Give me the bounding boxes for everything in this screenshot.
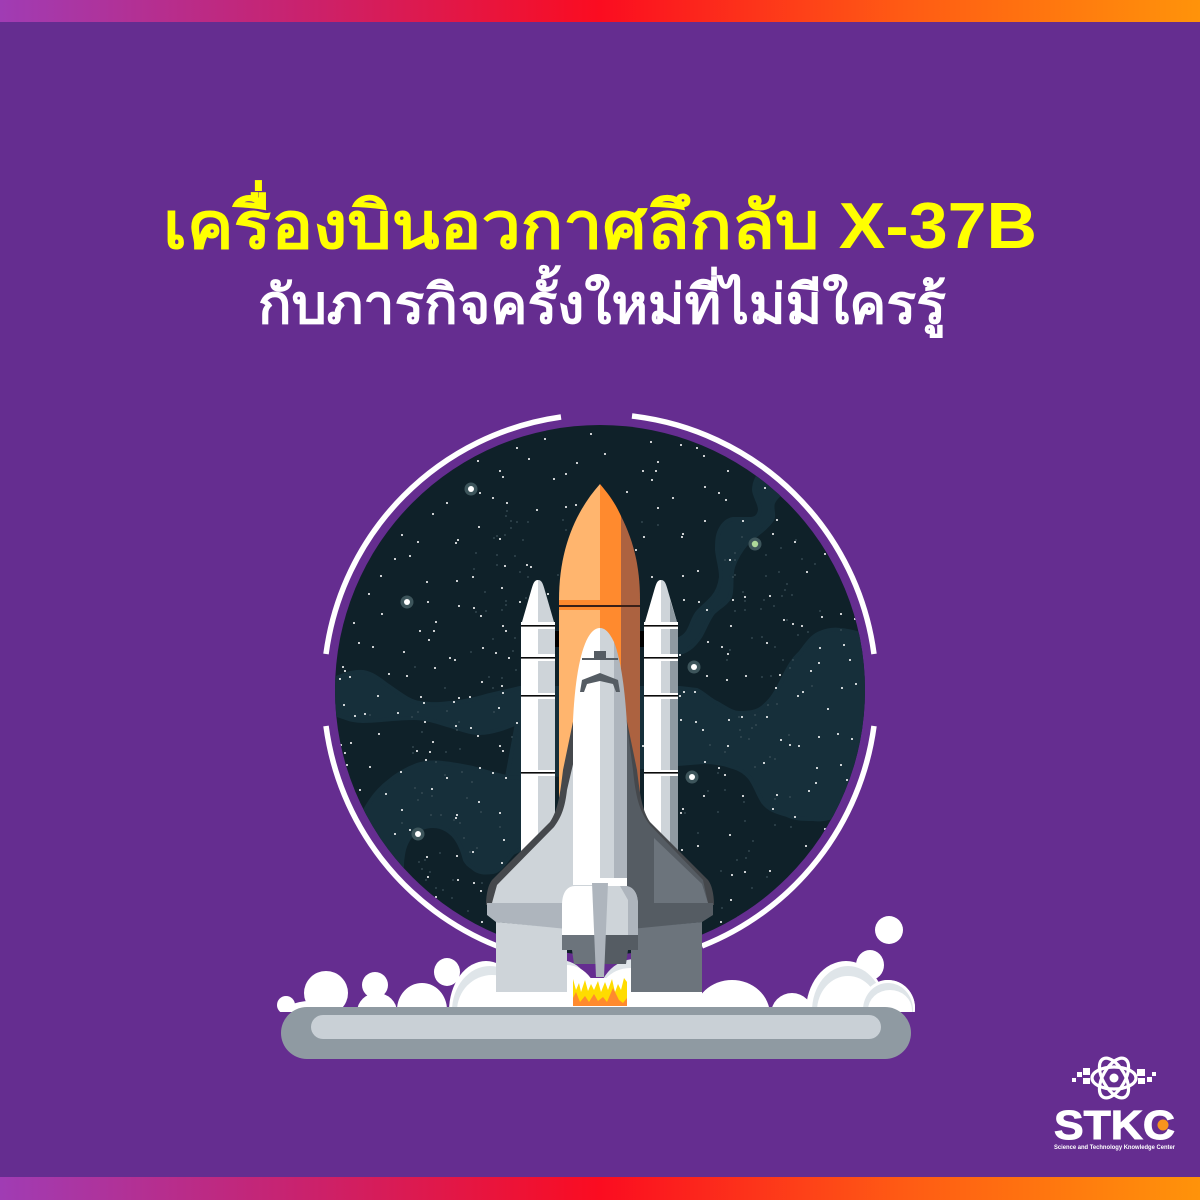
bottom gradient bar [0, 1177, 1200, 1200]
glowing stars [400, 482, 762, 840]
left wing [492, 760, 600, 903]
icon: atom [1092, 1053, 1136, 1103]
clouds of smoke [277, 916, 915, 1012]
icon: data pixels [1072, 1068, 1156, 1084]
central plume [522, 959, 769, 1007]
left booster [521, 580, 555, 876]
title [163, 180, 1037, 338]
tagline: Science and Technology Knowledge Center [1054, 1145, 1176, 1151]
wing underside [487, 903, 600, 933]
tail fin [592, 883, 608, 977]
orbiter fuselage [573, 628, 627, 886]
wordmark: STKC [1054, 1102, 1175, 1148]
heading line: white: กับภารกิจครั้งใหม่ที่ไม่มีใครรู้ [258, 265, 946, 338]
nebula [325, 470, 875, 885]
night sky [325, 420, 875, 960]
bright stars [340, 434, 856, 922]
external fuel tank [559, 484, 640, 920]
logo: STKC [1054, 1053, 1176, 1151]
left clouds [277, 958, 496, 1012]
right clouds [772, 916, 915, 1012]
space shuttle and rocket [486, 484, 714, 1006]
top gradient bar [0, 0, 1200, 22]
illustration: space disc [325, 416, 875, 960]
icon: orange dot [1158, 1120, 1168, 1130]
wing outline [486, 712, 714, 905]
exhaust flame [573, 978, 627, 1006]
right booster [644, 580, 678, 876]
landing boxes [496, 922, 567, 992]
dim stars [370, 511, 841, 917]
right wing [627, 725, 708, 903]
black struts [553, 631, 647, 647]
left cloud shading [452, 966, 496, 1007]
right cloud shading [812, 966, 876, 1007]
heading line: yellow: เครื่องบินอวกาศลึกลับ X-37B [163, 180, 1037, 262]
launch platform [281, 1007, 911, 1059]
engine pod [562, 886, 638, 964]
ring arcs [326, 416, 874, 946]
